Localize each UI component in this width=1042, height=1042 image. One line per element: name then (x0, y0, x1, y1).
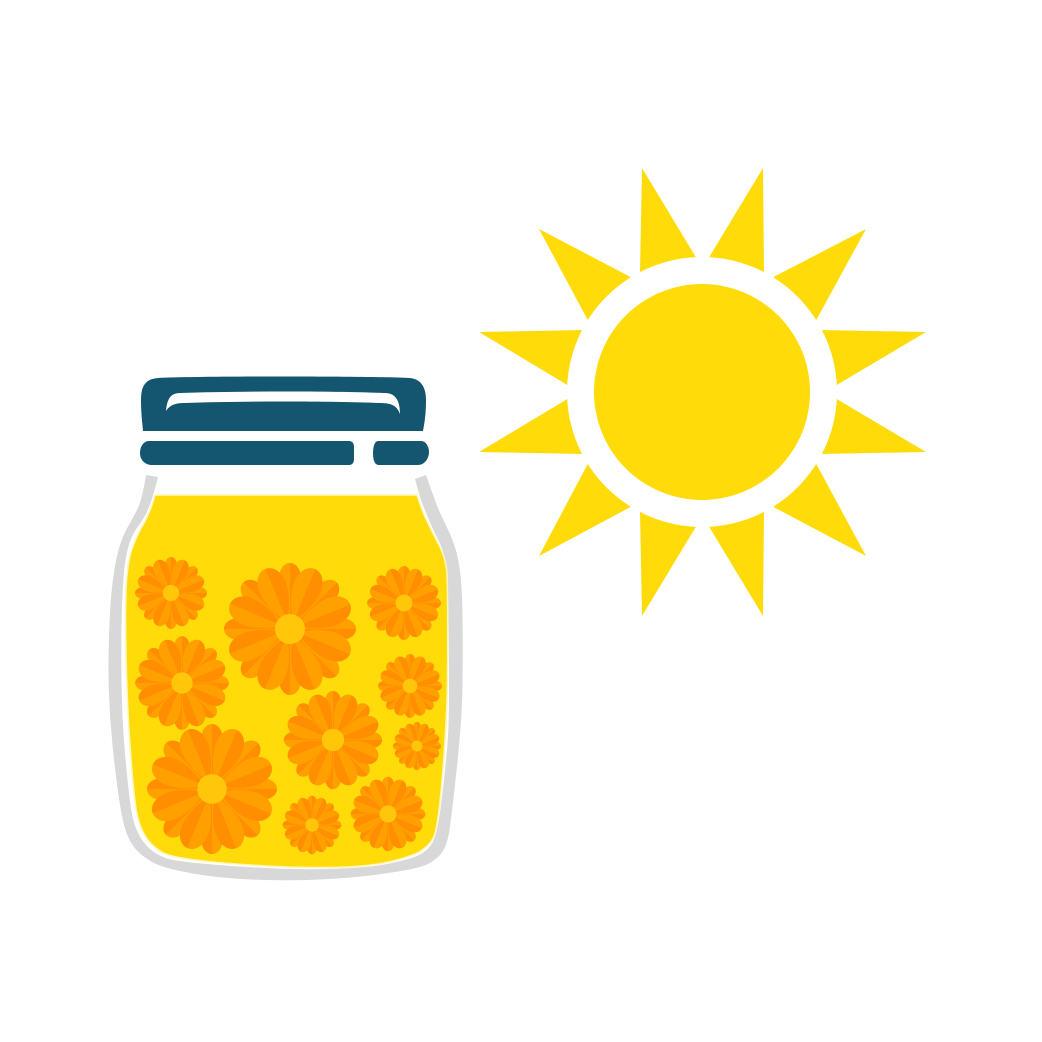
jar lid (141, 376, 426, 431)
flower 7 (393, 722, 441, 770)
flower 9 (283, 796, 341, 854)
flower 10 (351, 777, 425, 851)
flower 4 (135, 636, 229, 730)
flower 5 (378, 654, 442, 718)
flower 1 (135, 557, 207, 629)
flower 2 (224, 563, 356, 695)
sun ring (567, 257, 837, 527)
sun (479, 168, 926, 616)
jar band left (140, 441, 354, 465)
sun disc (594, 284, 810, 500)
jar glass outline (108, 475, 463, 880)
flower 3 (367, 566, 441, 640)
sun rays (479, 168, 926, 616)
jar band right (373, 441, 429, 465)
flower 8 (147, 724, 277, 854)
flower 6 (284, 691, 382, 789)
jar (108, 376, 463, 880)
jar liquid (126, 495, 448, 868)
